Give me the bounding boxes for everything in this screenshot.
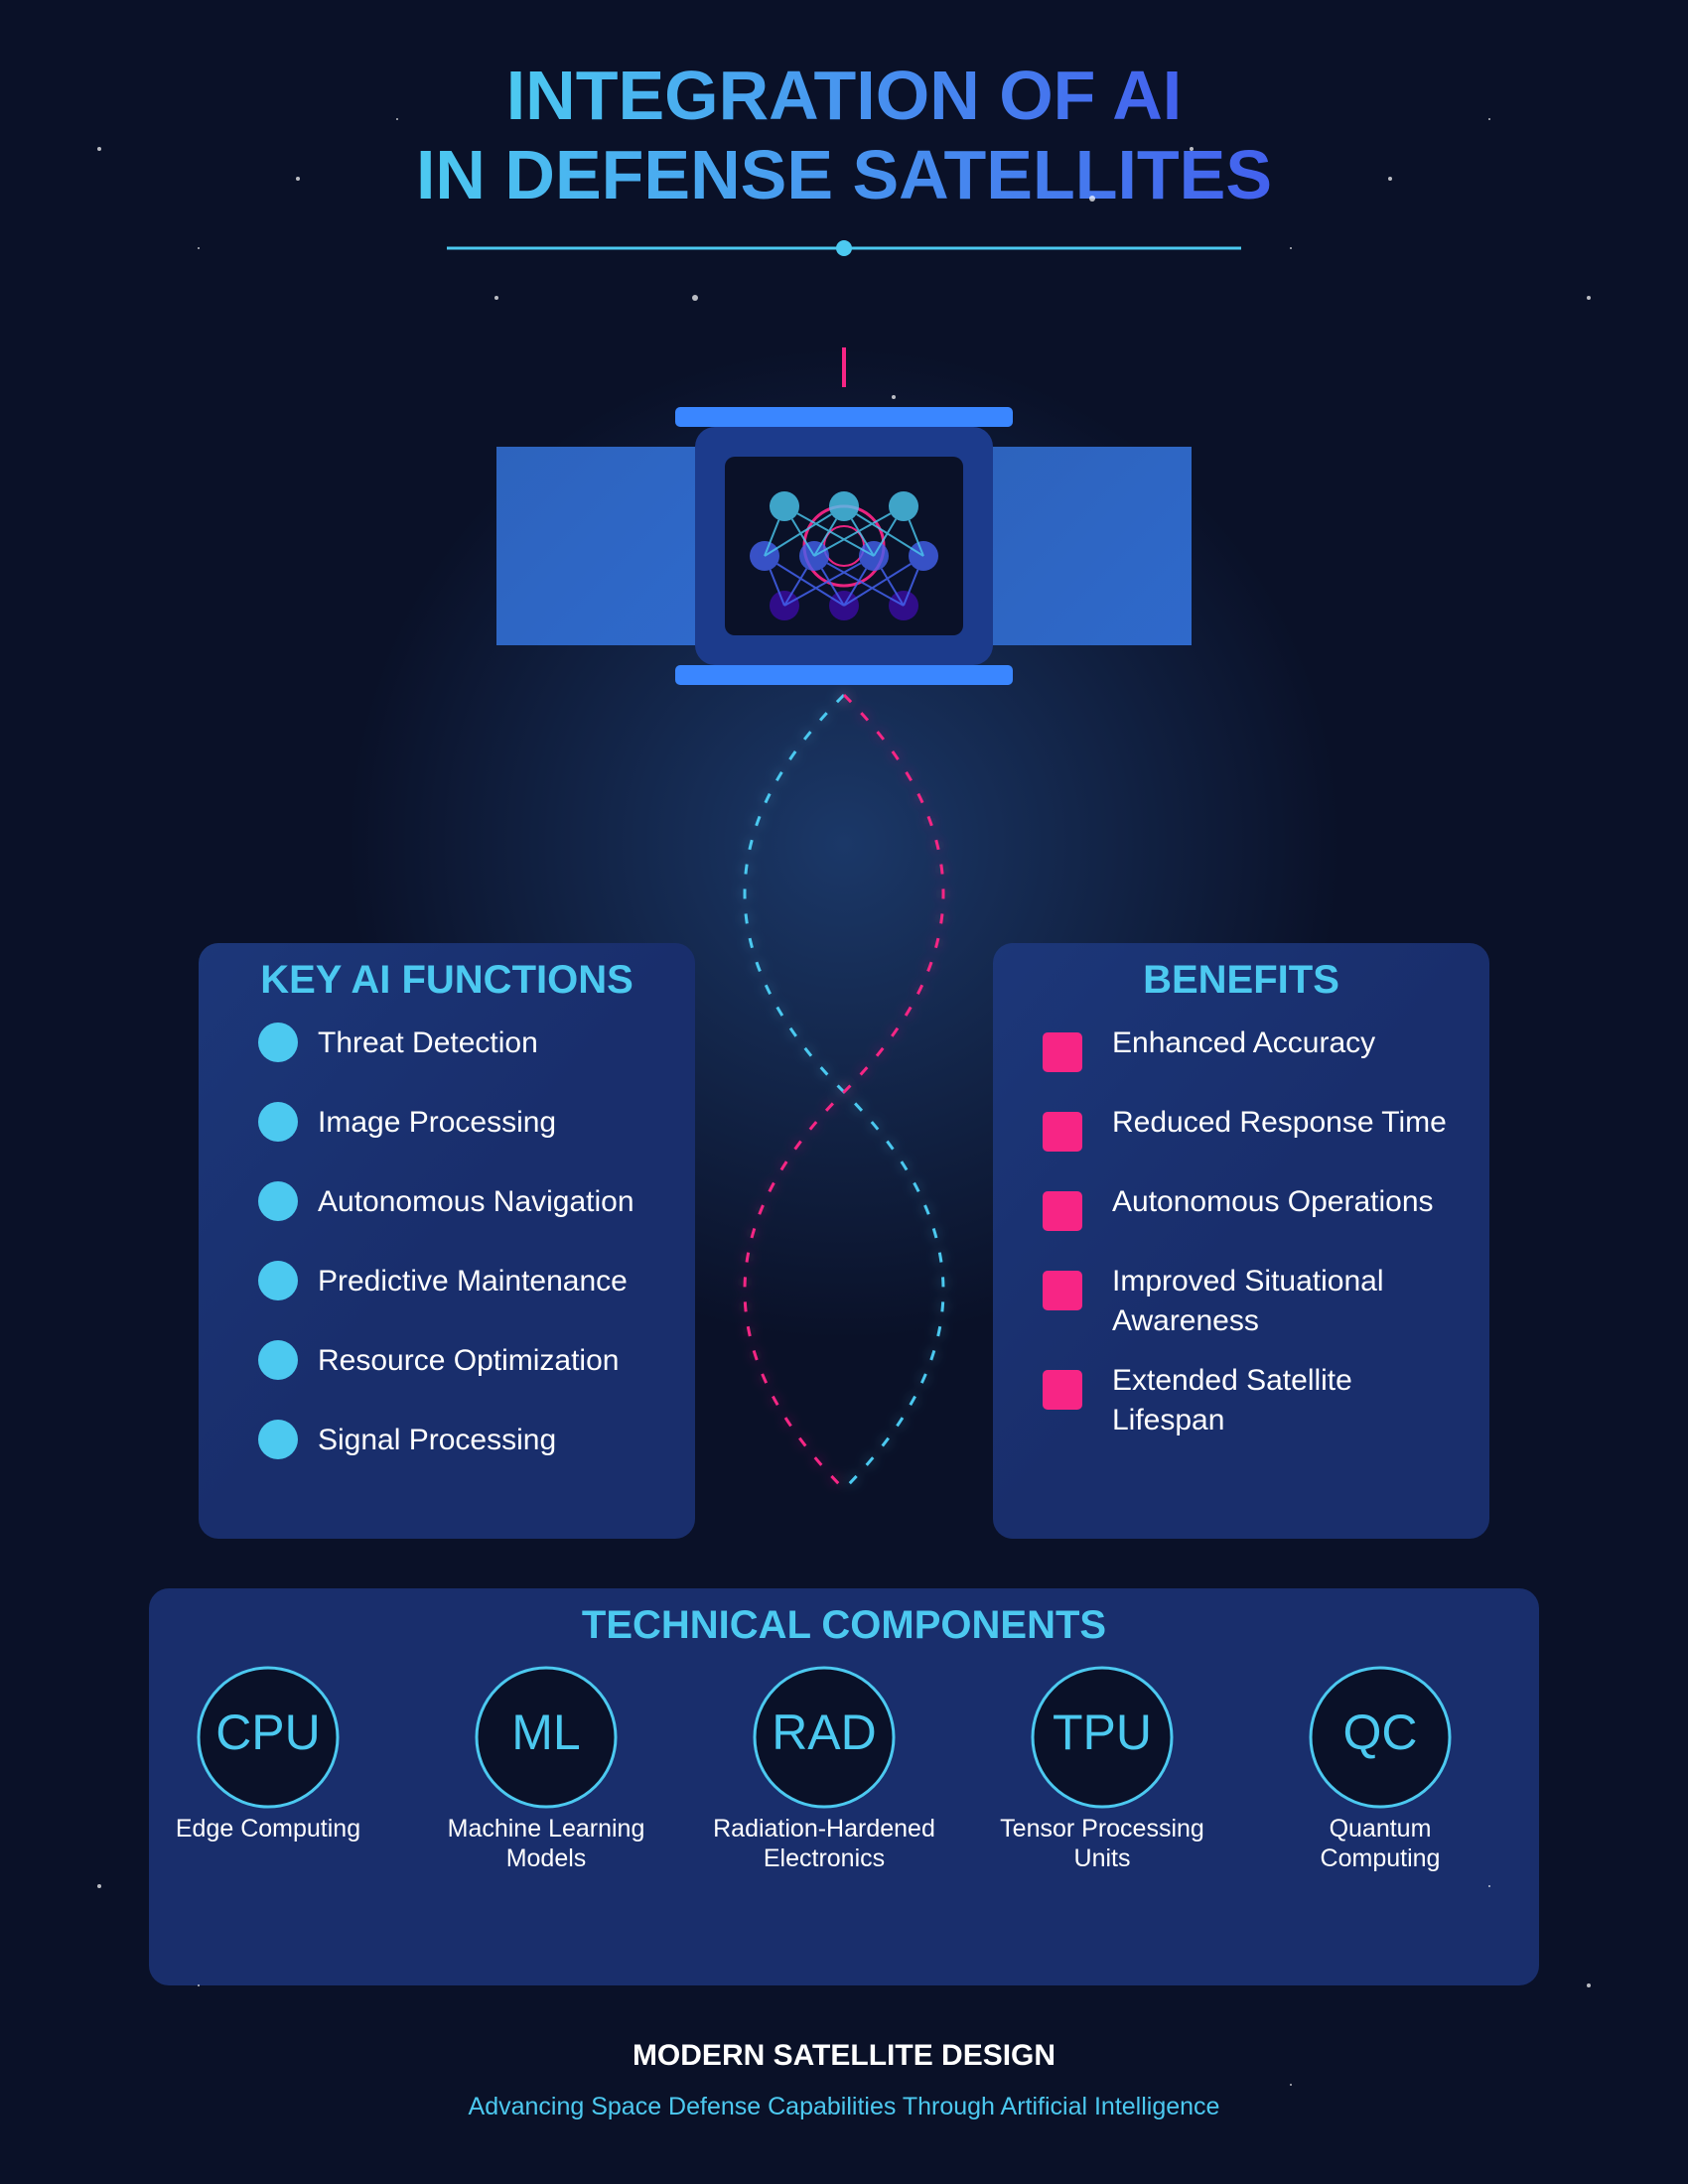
component: TPU xyxy=(1000,1668,1204,1872)
pink rings xyxy=(804,506,884,586)
top layer nodes xyxy=(770,491,918,521)
benefit list: Extended Satellite xyxy=(1112,1364,1352,1397)
data helix xyxy=(745,695,943,1489)
component: TPU: Units xyxy=(1074,1844,1130,1872)
function list: Signal Processing xyxy=(318,1424,556,1456)
mid to bottom links xyxy=(771,563,917,606)
footer xyxy=(469,2039,1219,2120)
panel: benefits xyxy=(993,943,1489,1539)
middle layer nodes xyxy=(750,541,938,571)
stars xyxy=(97,118,1591,2086)
benefit list: Improved Situational xyxy=(1112,1265,1384,1297)
heading: benefits: BENEFITS xyxy=(1143,958,1339,1002)
benefit list: Reduced Response Time xyxy=(1112,1106,1447,1139)
component: ML: ML xyxy=(511,1705,581,1760)
component: RAD xyxy=(713,1668,935,1872)
component: CPU: CPU xyxy=(215,1705,321,1760)
title divider xyxy=(447,240,1241,256)
panel: technical components xyxy=(149,1588,1539,1985)
benefit list xyxy=(1043,1026,1447,1436)
component: QC: Quantum xyxy=(1330,1815,1431,1843)
heading: technical components: TECHNICAL COMPONENTS xyxy=(582,1603,1106,1647)
component: RAD: RAD xyxy=(772,1705,877,1760)
satellite body xyxy=(695,427,993,665)
title: INTEGRATION OF AI xyxy=(506,57,1182,134)
component: QC: Computing xyxy=(1321,1844,1440,1872)
function list: Threat Detection xyxy=(318,1026,538,1059)
satellite xyxy=(496,347,1192,685)
top to mid links xyxy=(765,513,923,556)
title xyxy=(416,57,1272,213)
central glow xyxy=(348,347,1340,1340)
benefit list: Awareness xyxy=(1112,1304,1259,1337)
component: ML: Machine Learning xyxy=(448,1815,644,1843)
benefit list: Lifespan xyxy=(1112,1404,1224,1436)
component: QC: QC xyxy=(1342,1705,1418,1760)
benefit list: Autonomous Operations xyxy=(1112,1185,1434,1218)
panel: key AI functions xyxy=(199,943,695,1539)
component: RAD: Electronics xyxy=(764,1844,885,1872)
footer heading: MODERN SATELLITE DESIGN xyxy=(633,2039,1055,2072)
component: ML xyxy=(448,1668,644,1872)
component: RAD: Radiation-Hardened xyxy=(713,1815,935,1843)
component: TPU: TPU xyxy=(1053,1705,1152,1760)
component: TPU: Tensor Processing xyxy=(1000,1815,1204,1843)
screen xyxy=(725,457,963,635)
bottom layer nodes xyxy=(770,591,918,620)
function list: Autonomous Navigation xyxy=(318,1185,634,1218)
function list: Resource Optimization xyxy=(318,1344,619,1377)
top bar xyxy=(675,407,1013,427)
footer tagline: Advancing Space Defense Capabilities Through Artificial Intelligence xyxy=(469,2093,1219,2120)
benefit list: Enhanced Accuracy xyxy=(1112,1026,1375,1059)
neural network xyxy=(750,491,938,620)
component: ML: Models xyxy=(506,1844,586,1872)
function list: Predictive Maintenance xyxy=(318,1265,628,1297)
right solar panel xyxy=(993,447,1192,645)
title: IN DEFENSE SATELLITES xyxy=(416,136,1272,213)
component: CPU xyxy=(176,1668,360,1843)
function list: Image Processing xyxy=(318,1106,556,1139)
component: QC xyxy=(1311,1668,1450,1872)
component: CPU: Edge Computing xyxy=(176,1815,360,1843)
heading: key AI functions: KEY AI FUNCTIONS xyxy=(260,958,633,1002)
function list xyxy=(258,1023,634,1459)
bottom bar xyxy=(675,665,1013,685)
left solar panel xyxy=(496,447,695,645)
antenna xyxy=(842,347,846,387)
